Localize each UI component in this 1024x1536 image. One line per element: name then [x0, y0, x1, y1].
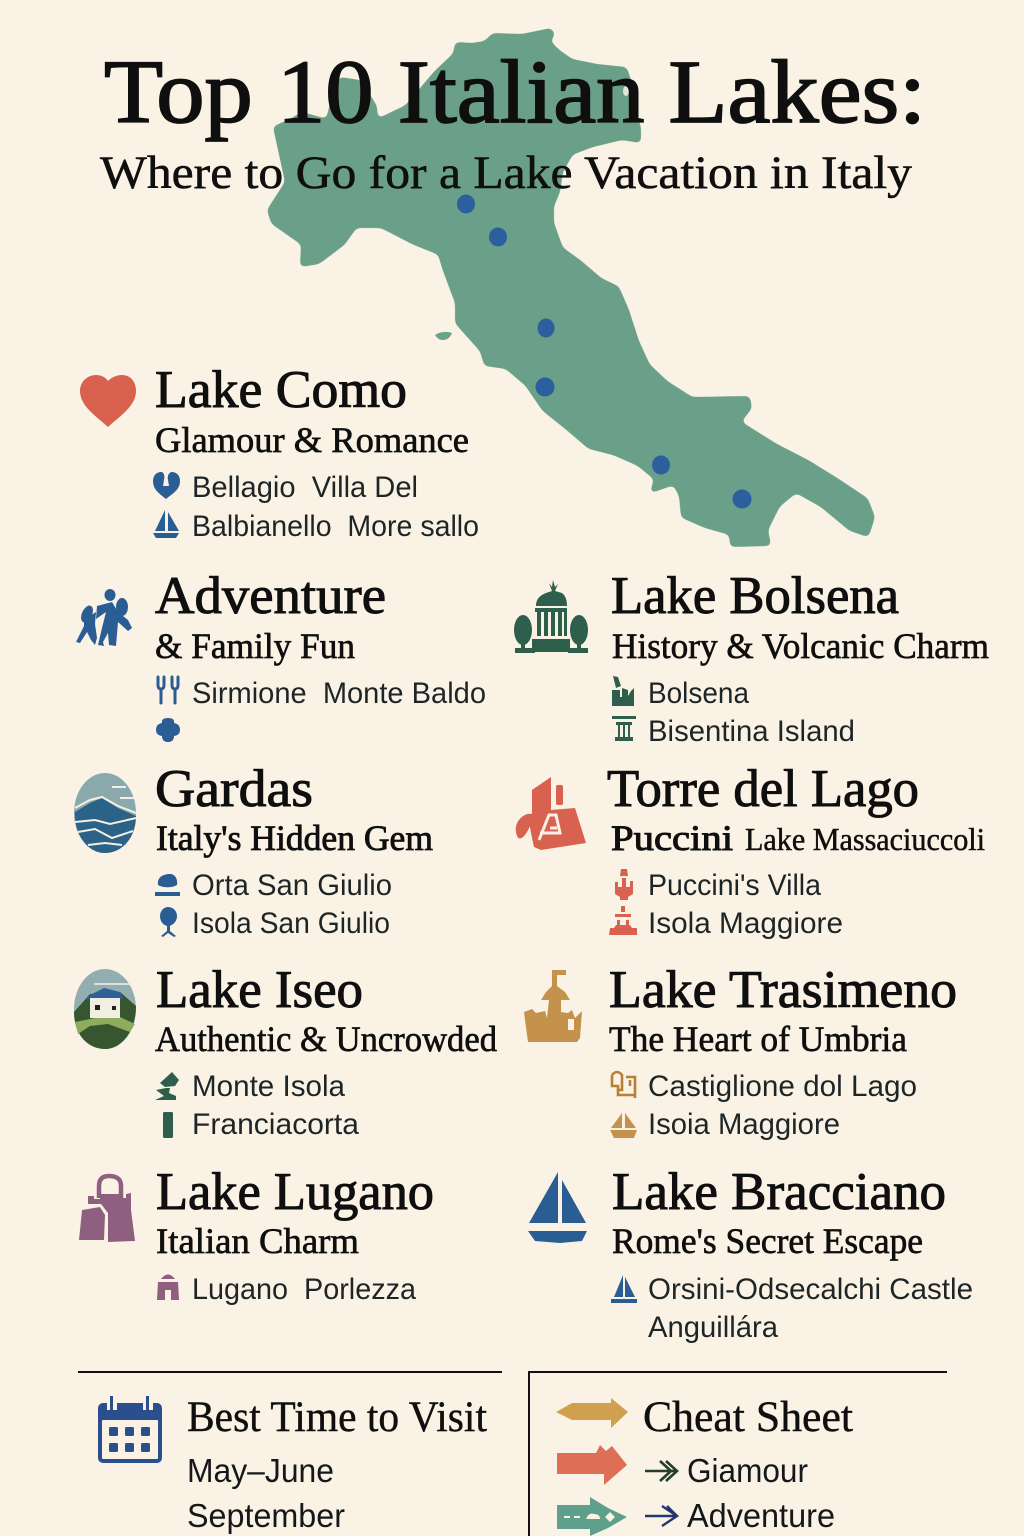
- icon: small heart: [153, 472, 180, 499]
- label: Adventure: [687, 1497, 835, 1534]
- heading: Lake Como: Lake Como: [155, 361, 407, 419]
- heading: Adventure: Adventure: [155, 567, 386, 625]
- tagline: & Family Fun: [155, 626, 355, 666]
- icon: music note tower: [516, 777, 586, 850]
- icon: small sailboat: [611, 1275, 637, 1303]
- icon: small arch: [157, 1274, 179, 1300]
- icon: small buildings: [612, 1072, 636, 1098]
- icon: calendar: [98, 1396, 162, 1463]
- title: Top 10 Italian Lakes:: [104, 43, 926, 142]
- panel: Lake Bracciano: [528, 1163, 973, 1344]
- panel: Best Time to Visit: [98, 1394, 487, 1534]
- place name: Isoia Maggiore: [648, 1108, 840, 1141]
- icon: small tree on hill: [155, 1072, 179, 1100]
- place names: Orta San Giulio: [192, 869, 392, 902]
- icon: castle: [524, 970, 582, 1042]
- place names: Bellagio Villa Del: [192, 471, 418, 504]
- tagline: Lake Massaciuccoli: Lake Massaciuccoli: [745, 821, 985, 857]
- place name: Anguillára: [648, 1311, 778, 1344]
- tagline: Puccini: Puccini: [611, 818, 733, 858]
- icon: teal arrow: [557, 1497, 627, 1536]
- arrow: Adventure key: [645, 1506, 677, 1526]
- arrow: Glamour key: [645, 1461, 677, 1481]
- place names: Sirmione Monte Baldo: [192, 677, 486, 710]
- icon: small sailboat: [610, 1113, 637, 1138]
- icon: clover: [156, 718, 180, 742]
- heading: Lake Bolsena: Lake Bolsena: [611, 567, 899, 625]
- panel: Lake Lugano: [79, 1163, 434, 1306]
- icon: fork and knife: [158, 677, 178, 703]
- place names: Isola San Giulio: [192, 907, 390, 940]
- place name: Isola Maggiore: [648, 907, 843, 940]
- icon: sailboat: [528, 1172, 587, 1243]
- icon: lake and mountains roundel: [74, 773, 136, 853]
- tagline: Italian Charm: [156, 1221, 359, 1261]
- panel: Cheat Sheet: [556, 1394, 853, 1536]
- icon: gold arrow: [556, 1398, 628, 1428]
- month: September: [187, 1497, 345, 1534]
- panel: Lake Como: [80, 361, 479, 543]
- icon: heart: [80, 375, 136, 427]
- heading: Lake Lugano: Lake Lugano: [156, 1163, 434, 1221]
- subtitle: Where to Go for a Lake Vacation in Italy: [100, 147, 913, 199]
- icon: small tree: [160, 907, 177, 937]
- heading: Lake Bracciano: Lake Bracciano: [612, 1163, 946, 1221]
- place names: Lugano Porlezza: [192, 1273, 416, 1306]
- tagline: Authentic & Uncrowded: [155, 1019, 497, 1059]
- icon: hikers: [76, 589, 132, 646]
- tagline: Italy's Hidden Gem: [156, 818, 433, 858]
- place name: Bolsena: [648, 677, 749, 710]
- heading: Cheat Sheet: [643, 1394, 853, 1441]
- icon: small ruins: [612, 676, 634, 706]
- heading: Lake Trasimeno: Lake Trasimeno: [609, 961, 957, 1019]
- panel: Lake Iseo: [74, 961, 497, 1141]
- panel: Adventure and Family Fun: [76, 567, 486, 742]
- place name: Puccini's Villa: [648, 869, 821, 902]
- icon: coral arrow: [557, 1445, 627, 1485]
- icon: small sailboat: [153, 510, 179, 538]
- heading: Gardas: Gardas: [155, 760, 313, 818]
- icon: villa on hill roundel: [74, 969, 136, 1049]
- place name: Franciacorta: [192, 1108, 359, 1141]
- map of Italy with lake markers: [268, 29, 874, 546]
- icon: small temple: [609, 906, 637, 935]
- place name: Castiglione dol Lago: [648, 1070, 917, 1103]
- icon: bag and castle: [79, 1176, 135, 1242]
- place names: Balbianello More sallo: [192, 510, 479, 543]
- icon: domed temple with trees: [514, 580, 588, 653]
- place names: Orsini-Odsecalchi Castle: [648, 1273, 973, 1306]
- heading: Lake Iseo: Lake Iseo: [156, 961, 363, 1019]
- place name: Monte Isola: [192, 1070, 345, 1103]
- tagline: Glamour & Romance: [155, 420, 469, 460]
- tagline: The Heart of Umbria: [609, 1019, 907, 1059]
- panel: Torre del Lago: [516, 760, 985, 940]
- panel: Gardas: [74, 760, 433, 940]
- panel: Lake Trasimeno: [524, 961, 957, 1141]
- tagline: History & Volcanic Charm: [612, 626, 989, 666]
- heading: Torre del Lago: Torre del Lago: [607, 760, 919, 818]
- icon: small hat: [155, 874, 180, 896]
- tagline: Rome's Secret Escape: [612, 1221, 923, 1261]
- icon: small bottle: [163, 1112, 173, 1138]
- panel: Lake Bolsena: [514, 567, 989, 748]
- heading: Best Time to Visit: [187, 1394, 487, 1441]
- place name: Bisentina Island: [648, 715, 855, 748]
- icon: small column: [612, 716, 636, 741]
- icon: small monument: [615, 869, 633, 900]
- month: May–June: [187, 1452, 334, 1489]
- label: Giamour: [687, 1452, 808, 1489]
